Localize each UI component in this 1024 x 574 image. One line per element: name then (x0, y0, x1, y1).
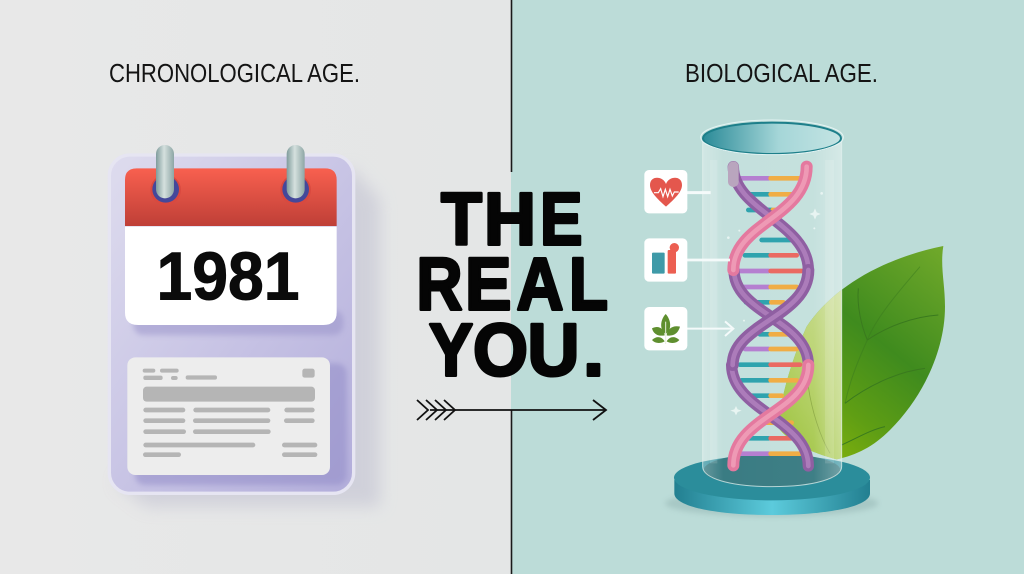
strand two (732, 167, 808, 466)
left background panel (0, 0, 511, 574)
title: the real you: A (516, 242, 564, 326)
icon: bars (644, 238, 687, 282)
right binder ring (280, 145, 311, 205)
title: the real you: E (540, 178, 582, 260)
cylinder top rim (701, 120, 843, 155)
icon: plant (644, 307, 687, 350)
calendar year: 1981 (156, 238, 300, 314)
pink strand (733, 167, 808, 465)
calendar red header (125, 168, 337, 226)
title: the real you (416, 178, 608, 392)
title: the real you: E (465, 242, 512, 326)
lower info card (127, 357, 330, 475)
title: the real you: T (441, 178, 482, 260)
title: the real you: . (583, 308, 604, 392)
connector: heart (687, 188, 711, 197)
title: the real you: R (416, 242, 462, 326)
biology illustration (644, 120, 950, 517)
arrow: chronological to biological (417, 400, 606, 420)
calendar illustration (109, 145, 380, 507)
title: the real you: L (569, 242, 608, 326)
leaf (773, 243, 950, 463)
heading: biological age: BIOLOGICAL AGE. (685, 60, 878, 88)
white page shadow (133, 310, 343, 335)
heading: chronological age: CHRONOLOGICAL AGE. (109, 60, 360, 88)
connector arrow: leaf (687, 321, 733, 336)
title: the real you: Y (429, 308, 473, 392)
glass cylinder front highlight (710, 160, 834, 463)
lower card shadow (135, 363, 347, 485)
glass sparkles (727, 192, 823, 415)
rungs of DNA (740, 178, 802, 454)
pedestal base (674, 453, 870, 515)
connector: bars (687, 256, 730, 264)
right background panel (511, 0, 1024, 574)
title: the real you: H (484, 178, 536, 260)
glass cylinder body (703, 138, 842, 487)
calendar shadow (117, 167, 380, 507)
white year page (125, 227, 337, 325)
back purple strand (734, 270, 808, 365)
calendar body (109, 155, 354, 493)
DNA strands (732, 167, 808, 466)
base shadow (665, 490, 878, 517)
center divider line (510, 0, 512, 574)
title: the real you: U (528, 308, 580, 392)
left binder ring (150, 145, 181, 205)
title: the real you: O (473, 308, 528, 392)
icon: heart rate (644, 170, 687, 213)
